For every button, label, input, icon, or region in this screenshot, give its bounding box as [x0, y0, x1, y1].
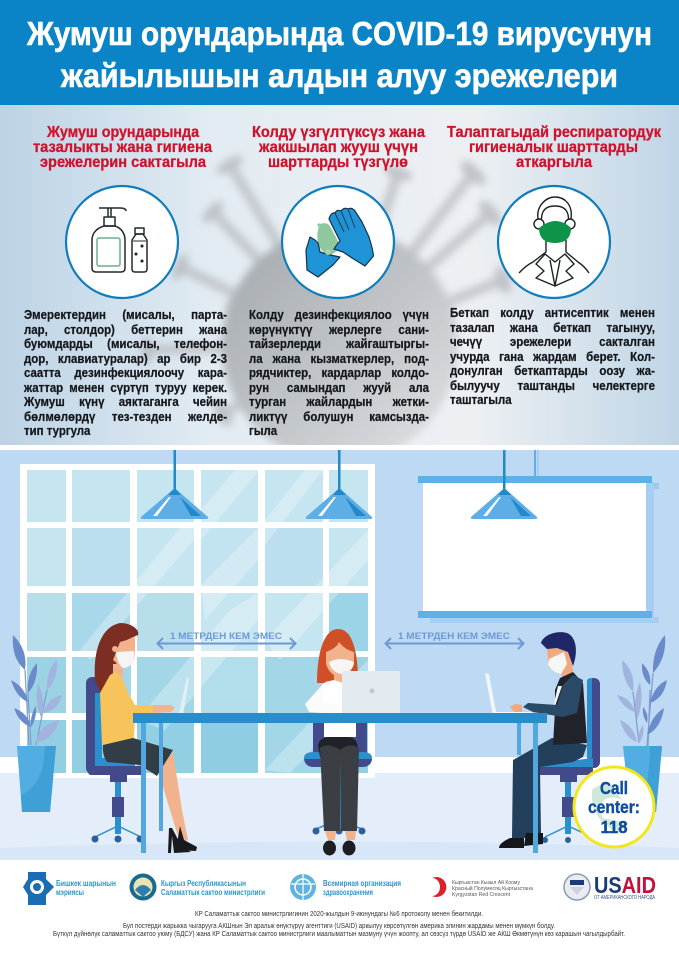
call center badge: center:	[588, 797, 640, 817]
text block: column 3: тазалап жана беткап тагынуу,	[450, 320, 655, 334]
legs and shoes	[158, 752, 188, 843]
sleeve	[523, 675, 583, 717]
mask	[548, 652, 567, 674]
yellow blouse	[100, 672, 153, 745]
panel: hygiene rules background with virus	[0, 105, 679, 463]
waist and pants	[318, 737, 358, 757]
office scene	[0, 450, 679, 860]
heading: column 2: жакшылап жууш үчүн	[258, 139, 418, 156]
call center badge: 118	[600, 817, 628, 837]
text block: column 3: донулган беткаптарды оозу жа-	[450, 363, 655, 378]
person: left woman on chair	[86, 623, 197, 853]
floor	[0, 773, 679, 860]
face	[113, 636, 135, 668]
laptop	[342, 671, 400, 715]
logo: Red Crescent: Kyrgyzstan Red Crescent	[452, 892, 511, 898]
icon: sanitizer bottles	[66, 186, 178, 298]
call center badge: Call	[600, 778, 628, 798]
whiteboard	[418, 450, 659, 623]
text block: column 2	[249, 307, 430, 438]
heading: column 3: аткаргыла	[516, 154, 592, 171]
heading: column 3	[447, 124, 662, 171]
shoes	[499, 838, 524, 848]
baseboard	[0, 757, 679, 773]
heading: column 2: Колду үзгүлтүксүз жана	[252, 124, 425, 141]
title	[26, 15, 652, 94]
laptop	[145, 677, 189, 716]
call center badge	[574, 767, 654, 847]
text block: column 1: лар, столдор) беттерин жана	[24, 322, 227, 336]
text block: column 3	[450, 305, 655, 407]
chair	[304, 723, 372, 834]
logo: Red Crescent	[432, 877, 533, 898]
laptop	[485, 673, 532, 716]
heading: column 2: шарттарды түзгүлө	[268, 154, 408, 171]
text block: column 3: учурда гана жардам берет. Кол-	[450, 348, 655, 364]
logo: USAID: ОТ АМЕРИКАНСКОГО НАРОДА	[594, 895, 656, 901]
left plant	[11, 635, 62, 812]
text block: column 2: ликтүү болушун камсызда-	[249, 408, 429, 424]
window	[20, 464, 375, 778]
face	[547, 647, 574, 680]
blouse	[320, 680, 356, 737]
text block: column 1: тип тургула	[24, 423, 90, 438]
mask	[329, 659, 354, 674]
person: center woman on chair	[304, 629, 400, 856]
footer notes: Бул постерди жарыкка чыгарууга АКШнын Эл аралык өнүктүрүү агенттиги (USAID) аркылуу көрсөтүлгөн америка элинин жардамы менен мүмкүн болду.	[123, 922, 555, 930]
icon: person wearing mask	[498, 186, 610, 298]
chair	[86, 677, 144, 842]
logo: Red Crescent: Кыргызстан Кызыл Ай Коому	[452, 879, 520, 886]
logo: USAID: USAID	[594, 872, 656, 898]
text block: column 1: Эмеректердин (мисалы, парта-	[24, 307, 227, 322]
hair	[541, 632, 576, 666]
text block: column 2: турган жайлардын жетки-	[249, 394, 429, 409]
heading: column 1	[33, 124, 212, 171]
text block: column 1: дор, клавиатуралар) ар бир 2-3	[24, 350, 227, 366]
logo: Kyrgyz Ministry of Health: Саламаттык сактоо министрлиги	[161, 888, 265, 897]
logo: Kyrgyz Ministry of Health: Кыргыз Республикасынын	[161, 879, 246, 888]
text block: column 1: бөлмөлөрдү тез-тезден желде-	[24, 408, 227, 424]
title: жайылышын алдын алуу эрежелери	[60, 57, 618, 94]
text block: column 1: буюмдарды (мисалы, телефон-	[24, 336, 227, 351]
text block: column 2: ла жана кызматкерлер, под-	[249, 350, 429, 366]
logo: Bishkek city hall: мэриясы	[56, 888, 84, 897]
text block: column 3: чечүү эрежелери сакталган	[450, 334, 655, 349]
text block: column 3: таштагыла	[450, 392, 512, 407]
footer notes	[53, 910, 625, 938]
text block: column 2: көрүнүктүү жерлерге сани-	[249, 322, 429, 336]
logo: Bishkek city hall: Бишкек шарынын	[56, 879, 116, 888]
text block: column 2: тайзерлерди жайгаштыргы-	[249, 336, 429, 351]
icon: gloved hands with soap	[282, 186, 394, 298]
hair	[317, 629, 358, 683]
hanging lamps	[141, 450, 537, 519]
text block: column 1	[24, 307, 228, 438]
text block: column 2: рядчиктер, кардарлар колдо-	[249, 365, 429, 380]
text block: column 2: рун самындап жууй ала	[249, 380, 429, 394]
distance arrow 1	[158, 631, 296, 649]
logo: Kyrgyz Ministry of Health	[130, 874, 265, 900]
hand	[510, 704, 522, 712]
distance arrow 1: 1 МЕТРДЕН КЕМ ЭМЕС	[170, 631, 282, 642]
logo: WHO: Всемирная организация	[323, 879, 401, 888]
heading: column 3: Талаптагыдай респиратордук	[447, 124, 662, 141]
logo: Red Crescent: Красный Полумесяц Кыргызстана	[452, 885, 533, 892]
heading: column 1: Жумуш орундарында	[46, 124, 199, 141]
mask	[116, 651, 135, 668]
text block: column 2: гыла	[249, 423, 277, 438]
text block: column 1: саатта дезинфекциялоочу кара-	[24, 365, 227, 380]
chair	[537, 678, 600, 843]
text block: column 2: Колду дезинфекциялоо үчүн	[249, 307, 429, 322]
heading: column 3: гигиеналык шарттарды	[469, 139, 638, 156]
skirt	[103, 738, 173, 776]
text block: column 3: былуучу таштанды челектерге	[450, 378, 655, 392]
pants	[512, 738, 587, 838]
text block: column 3: Беткап колду антисептик менен	[450, 305, 655, 320]
distance arrow 2	[386, 631, 524, 649]
feet	[325, 831, 356, 840]
right plant	[617, 635, 667, 812]
logo: WHO	[290, 874, 401, 900]
logo: Bishkek city hall	[23, 872, 116, 905]
footer notes: КР Саламаттык сактоо министрлигинин 2020-жылдын 9-июнундагы №6 протоколу менен бекитилди.	[195, 910, 483, 918]
text block: column 1: жаттар менен сүртүп туруу керек.	[24, 380, 227, 394]
jacket	[553, 672, 587, 745]
hair	[95, 623, 138, 692]
text block: column 1: Жумуш күнү аяктаганга чейин	[24, 394, 227, 409]
desk	[133, 713, 547, 853]
heading: column 2	[252, 124, 425, 171]
distance arrow 2: 1 МЕТРДЕН КЕМ ЭМЕС	[398, 631, 510, 642]
person: right man on chair	[485, 632, 600, 848]
logo: USAID	[564, 872, 656, 901]
logo: WHO: здравоохранения	[323, 888, 373, 897]
heading: column 1: эрежелерин сактагыла	[40, 154, 206, 171]
header band	[0, 0, 679, 105]
face	[326, 642, 354, 677]
wall	[0, 450, 679, 757]
heading: column 1: тазалыкты жана гигиена	[33, 139, 212, 156]
